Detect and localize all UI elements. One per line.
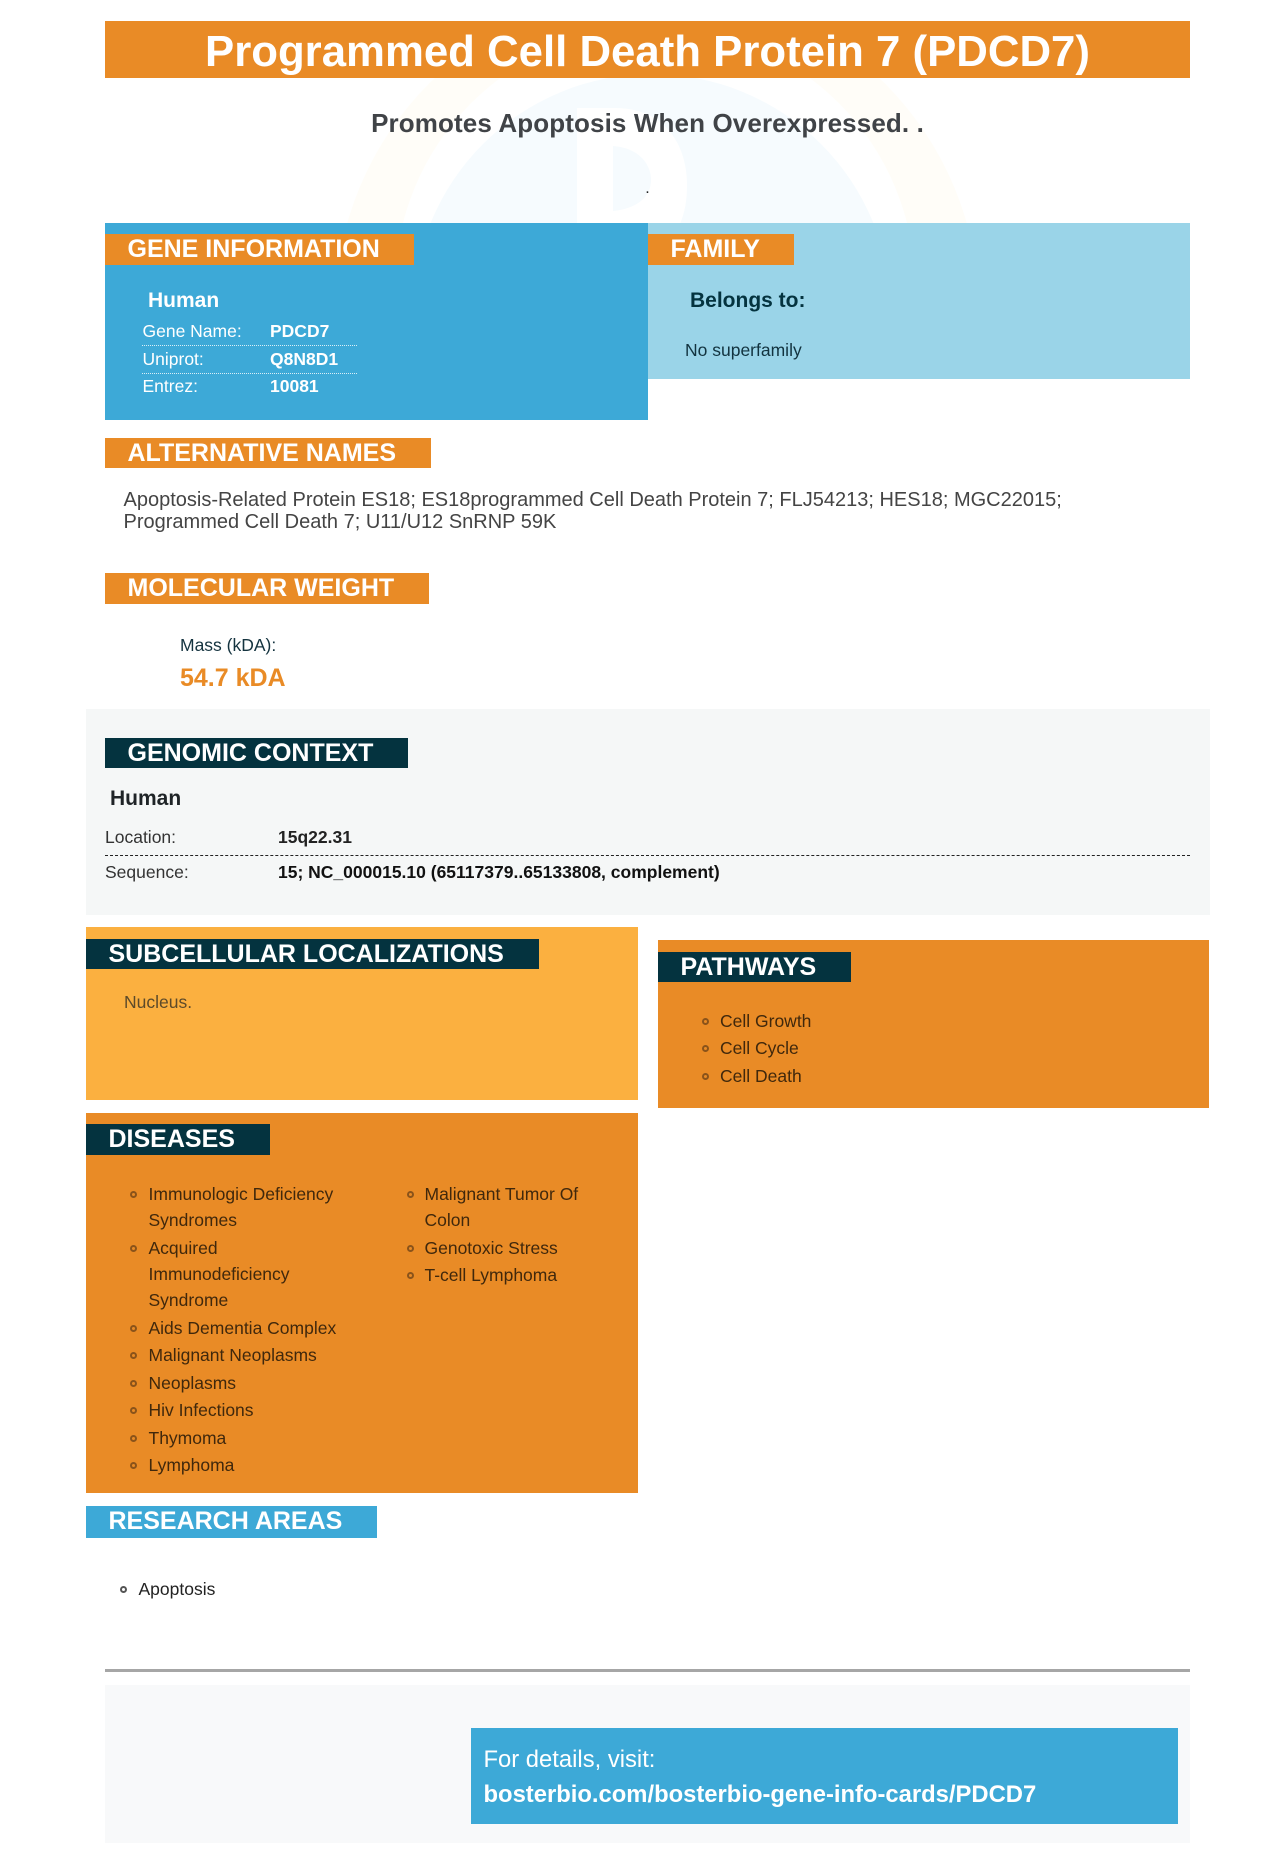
- heading: genomic context: GENOMIC CONTEXT: [128, 739, 373, 767]
- mass label: Mass (kDA):: [180, 635, 276, 655]
- diseases list column 2: [407, 1184, 578, 1285]
- row: uniprot: Q8N8D1: [270, 349, 338, 369]
- alternative names text: Apoptosis-Related Protein ES18; ES18programmed Cell Death Protein 7; FLJ54213; HES18; MGC22015;: [124, 489, 1062, 511]
- species label: Human: [148, 289, 219, 312]
- title banner: Programmed Cell Death Protein 7 (PDCD7): [205, 27, 1090, 76]
- heading: family: [648, 234, 794, 265]
- panel: diseases: [86, 1113, 638, 1493]
- heading: diseases: [86, 1124, 270, 1155]
- superfamily value: No superfamily: [685, 340, 802, 360]
- row: sequence: Sequence:: [105, 862, 189, 882]
- heading: molecular weight: MOLECULAR WEIGHT: [128, 574, 394, 602]
- diseases list column 1: Neoplasms: [148, 1373, 236, 1393]
- heading: pathways: PATHWAYS: [680, 953, 816, 981]
- diseases list column 1: Aids Dementia Complex: [148, 1318, 336, 1338]
- localization text: Nucleus.: [124, 992, 192, 1012]
- mass value: 54.7 kDA: [180, 664, 286, 692]
- belongs to label: Belongs to:: [690, 289, 806, 312]
- panel: footer: [105, 1685, 1190, 1843]
- heading: gene information: GENE INFORMATION: [128, 235, 380, 263]
- heading: alternative names: ALTERNATIVE NAMES: [128, 439, 396, 467]
- alternative names text: [124, 489, 1062, 533]
- row: sequence: 15; NC_000015.10 (65117379..65133808, complement): [278, 862, 720, 882]
- panel: pathways: [658, 940, 1209, 1108]
- alternative names text: Programmed Cell Death 7; U11/U12 SnRNP 59K: [124, 511, 556, 533]
- row: uniprot: [142, 349, 338, 369]
- callout: details link: [471, 1728, 1178, 1824]
- pathways list: Cell Growth: [720, 1011, 811, 1031]
- heading: subcellular localizations: SUBCELLULAR LOCALIZATIONS: [108, 940, 504, 968]
- heading: diseases: DISEASES: [108, 1125, 235, 1153]
- row: gene name: Gene Name:: [142, 321, 242, 341]
- row: uniprot: Uniprot:: [142, 349, 204, 369]
- diseases list column 1: Lymphoma: [148, 1455, 234, 1475]
- pathways list: Cell Death: [720, 1066, 802, 1086]
- row: entrez: Entrez:: [142, 376, 198, 396]
- panel: subcellular localizations: [86, 927, 638, 1100]
- subtitle: Promotes Apoptosis When Overexpressed. .: [371, 108, 924, 138]
- panel: family: [648, 223, 1190, 379]
- diseases list column 2: Malignant Tumor Of: [424, 1184, 578, 1204]
- description dot: .: [645, 180, 650, 197]
- diseases list column 2: Genotoxic Stress: [424, 1238, 558, 1258]
- heading: pathways: [658, 952, 851, 982]
- row: gene name: [142, 321, 329, 341]
- footer divider: [105, 1669, 1190, 1672]
- diseases list column 2: T-cell Lymphoma: [424, 1265, 557, 1285]
- species label: Human: [110, 787, 181, 810]
- watermark logo: [431, 78, 873, 223]
- row: entrez: [142, 376, 319, 396]
- row: gene name: PDCD7: [270, 321, 329, 341]
- heading: research areas: RESEARCH AREAS: [108, 1507, 342, 1535]
- diseases list column 1: Thymoma: [148, 1428, 226, 1448]
- panel: genomic context: [86, 709, 1210, 915]
- pathways list: Cell Cycle: [720, 1038, 799, 1058]
- diseases list column 1: Syndromes: [148, 1210, 237, 1230]
- diseases list column 1: Immunodeficiency: [148, 1264, 290, 1284]
- callout text: For details, visit:: [484, 1746, 655, 1773]
- diseases list column 1: Immunologic Deficiency: [148, 1184, 333, 1204]
- row: location: 15q22.31: [278, 827, 352, 847]
- diseases list column 2: Colon: [424, 1210, 470, 1230]
- research areas list: Apoptosis: [138, 1579, 215, 1599]
- diseases list column 1: Hiv Infections: [148, 1400, 254, 1420]
- panel: gene information: [105, 223, 648, 420]
- heading: family: FAMILY: [670, 235, 760, 263]
- row: location: [105, 827, 352, 847]
- row: entrez: 10081: [270, 376, 319, 396]
- row: location: Location:: [105, 827, 176, 847]
- diseases list column 1: Syndrome: [148, 1290, 228, 1310]
- diseases list column 1: Acquired: [148, 1238, 218, 1258]
- diseases list column 1: [130, 1184, 336, 1475]
- pathways list: [702, 1011, 811, 1086]
- callout url: bosterbio.com/bosterbio-gene-info-cards/PDCD7: [484, 1781, 1036, 1808]
- diseases list column 1: Malignant Neoplasms: [148, 1345, 317, 1365]
